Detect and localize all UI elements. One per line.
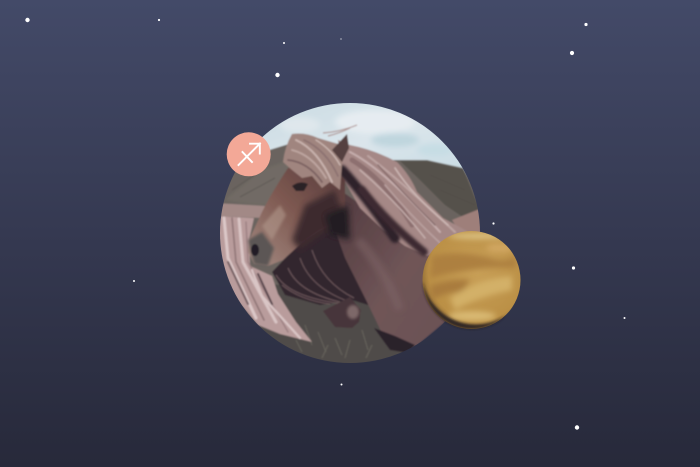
right distant mane — [452, 209, 480, 232]
photo circle: horse — [215, 98, 485, 370]
dark under mane — [272, 228, 368, 306]
long pale mane left — [216, 216, 312, 342]
icon: sagittarius arrow — [238, 144, 260, 165]
ear — [332, 134, 349, 162]
planet: Jupiter — [422, 231, 520, 329]
foal head — [323, 297, 361, 328]
forelock — [283, 134, 345, 190]
horse body — [335, 190, 445, 353]
grass — [242, 284, 402, 363]
stars — [25, 18, 626, 430]
main mane — [338, 140, 467, 256]
sagittarius badge — [227, 132, 271, 176]
hills — [224, 144, 476, 286]
horse head — [248, 168, 345, 266]
fence band — [216, 203, 265, 218]
sky — [262, 103, 468, 178]
eye — [292, 182, 308, 191]
